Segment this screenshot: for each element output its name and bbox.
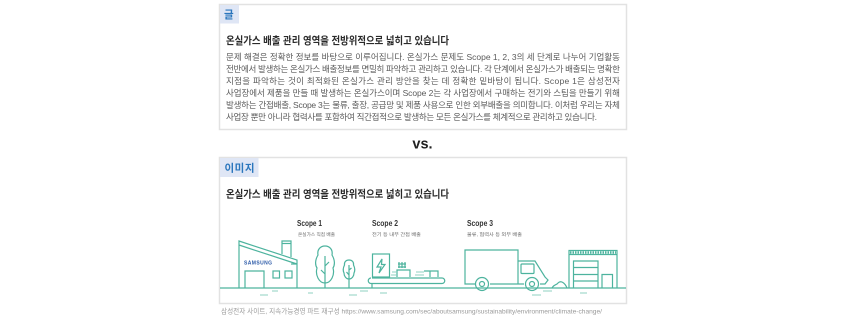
scope 1 label: Scope 1 [297,218,322,228]
label: image tab [220,158,258,177]
ground line [220,287,626,289]
body paragraph: 발생하는 간접배출, Scope 3는 물류, 출장, 공급망 및 제품 사용으로 인한 외부배출을 의미합니다. 이처럼 우리는 자체 [226,100,620,110]
body paragraph: 문제 해결은 정확한 정보를 바탕으로 이루어집니다. 온실가스 문제도 Scope 1, 2, 3의 세 단계로 나누어 기업활동 [226,52,620,62]
scope 2 label: Scope 2 [372,218,398,228]
label: text tab [220,5,239,24]
icon: small tree [343,260,355,288]
scope 1 label: 온실가스 직접 배출 [298,231,335,238]
scope 3 label: 물류, 협력사 등 외부 배출 [467,231,522,238]
panel: text version [220,4,626,130]
icon: large tree [316,246,334,288]
heading: image version: 온실가스 배출 관리 영역을 전방위적으로 넓히고 있습니다 [226,188,449,200]
icon: factory [239,241,297,288]
body paragraph: 사업장에서 제품을 만들 때 발생하는 온실가스이며 Scope 2는 각 사업장에서 구매하는 전기와 스팀을 만들기 위해 [226,88,620,98]
icon: power supply and platform [368,254,445,288]
icon: warehouse [569,250,617,288]
source caption: 삼성전자 사이트, 지속가능경영 파트 재구성 https://www.samsung.com/sec/aboutsamsung/sustainability/environment/climate-change/ [221,306,602,316]
ground marks [260,291,587,295]
body paragraph: 사업장 뿐만 아니라 협력사를 포함하여 직간접적으로 발생하는 모든 온실가스를 체계적으로 관리하고 있습니다. [226,112,597,122]
scope 3 label [467,218,522,238]
panel: image version [220,158,626,304]
body paragraph [226,52,620,122]
scope 3 label: Scope 3 [467,218,493,228]
scope 1 label [297,218,335,238]
label: image tab: 이미지 [224,162,254,174]
vs. heading: vs. [412,136,433,152]
icon: truck [465,250,548,290]
body paragraph: 전반에서 발생하는 온실가스 배출정보를 면밀히 파악하고 관리하고 있습니다. 각 단계에서 온실가스가 배출되는 명확한 [226,64,620,74]
label: text tab: 글 [224,9,234,21]
heading: text version: 온실가스 배출 관리 영역을 전방위적으로 넓히고 있습니다 [226,34,449,47]
scope 2 label [372,218,421,238]
icon: factory: SAMSUNG [244,260,272,266]
body paragraph: 지점을 파악하는 것이 최적화된 온실가스 관리 방안을 찾는 데 정확한 밑바탕이 됩니다. Scope 1은 삼성전자 [226,76,620,86]
scope 2 label: 전기 등 내부 간접 배출 [372,231,421,238]
icon: bush [552,282,567,288]
